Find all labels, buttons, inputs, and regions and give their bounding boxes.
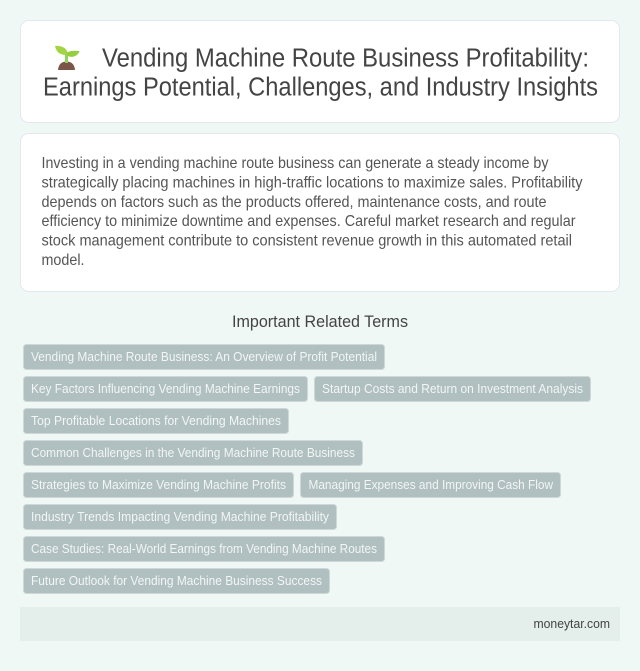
tag: case studies: Case Studies: Real-World Earnings from Vending Machine Routes	[31, 541, 377, 556]
panel: title card	[20, 20, 620, 122]
tag: industry trends: Industry Trends Impacting Vending Machine Profitability	[31, 509, 329, 524]
tag: future outlook	[24, 568, 330, 594]
tag: strategies: Strategies to Maximize Vending Machine Profits	[31, 477, 286, 492]
tag: challenges	[24, 440, 362, 466]
tag: key factors: Key Factors Influencing Vending Machine Earnings	[31, 381, 300, 396]
tag: industry trends	[24, 504, 336, 530]
footer bar	[20, 607, 620, 641]
tag: overview	[24, 344, 384, 370]
text block: introduction: Investing in a vending machine route business can generate a steady income by	[42, 155, 549, 172]
text block: introduction: efficiency to minimize downtime and expenses. Careful market research and regular	[42, 213, 576, 230]
icon: seedling	[55, 46, 80, 70]
tag: overview: Vending Machine Route Business: An Overview of Profit Potential	[31, 349, 377, 364]
tag: case studies	[24, 536, 384, 562]
tag: key factors	[24, 376, 308, 402]
tag: future outlook: Future Outlook for Vending Machine Business Success	[31, 573, 322, 588]
panel: intro text card	[20, 134, 620, 292]
text block: introduction: depends on factors such as the products offered, maintenance costs, and route	[42, 194, 546, 211]
heading: important related terms: Important Related Terms	[232, 313, 408, 331]
tag: managing expenses: Managing Expenses and Improving Cash Flow	[308, 477, 554, 492]
title: Vending Machine Route Business Profitability:	[102, 44, 589, 72]
tag: startup costs	[314, 376, 590, 402]
tag list	[24, 344, 590, 594]
text block: introduction: stock management contribute to consistent revenue growth in this automated retail	[42, 232, 572, 250]
tag: managing expenses	[300, 472, 560, 498]
tag: challenges: Common Challenges in the Vending Machine Route Business	[31, 445, 355, 460]
title: Earnings Potential, Challenges, and Industry Insights	[43, 74, 598, 102]
text block: introduction	[42, 155, 583, 269]
tag: locations	[24, 408, 288, 434]
footer source text: moneytar.com	[534, 617, 610, 631]
title	[43, 44, 598, 102]
tag: locations: Top Profitable Locations for Vending Machines	[31, 413, 281, 428]
tag: startup costs: Startup Costs and Return on Investment Analysis	[322, 381, 583, 396]
text block: introduction: model.	[42, 252, 84, 269]
text block: introduction: strategically placing machines in high-traffic locations to maximize sales. Profitability	[42, 174, 583, 192]
tag: strategies	[24, 472, 294, 498]
